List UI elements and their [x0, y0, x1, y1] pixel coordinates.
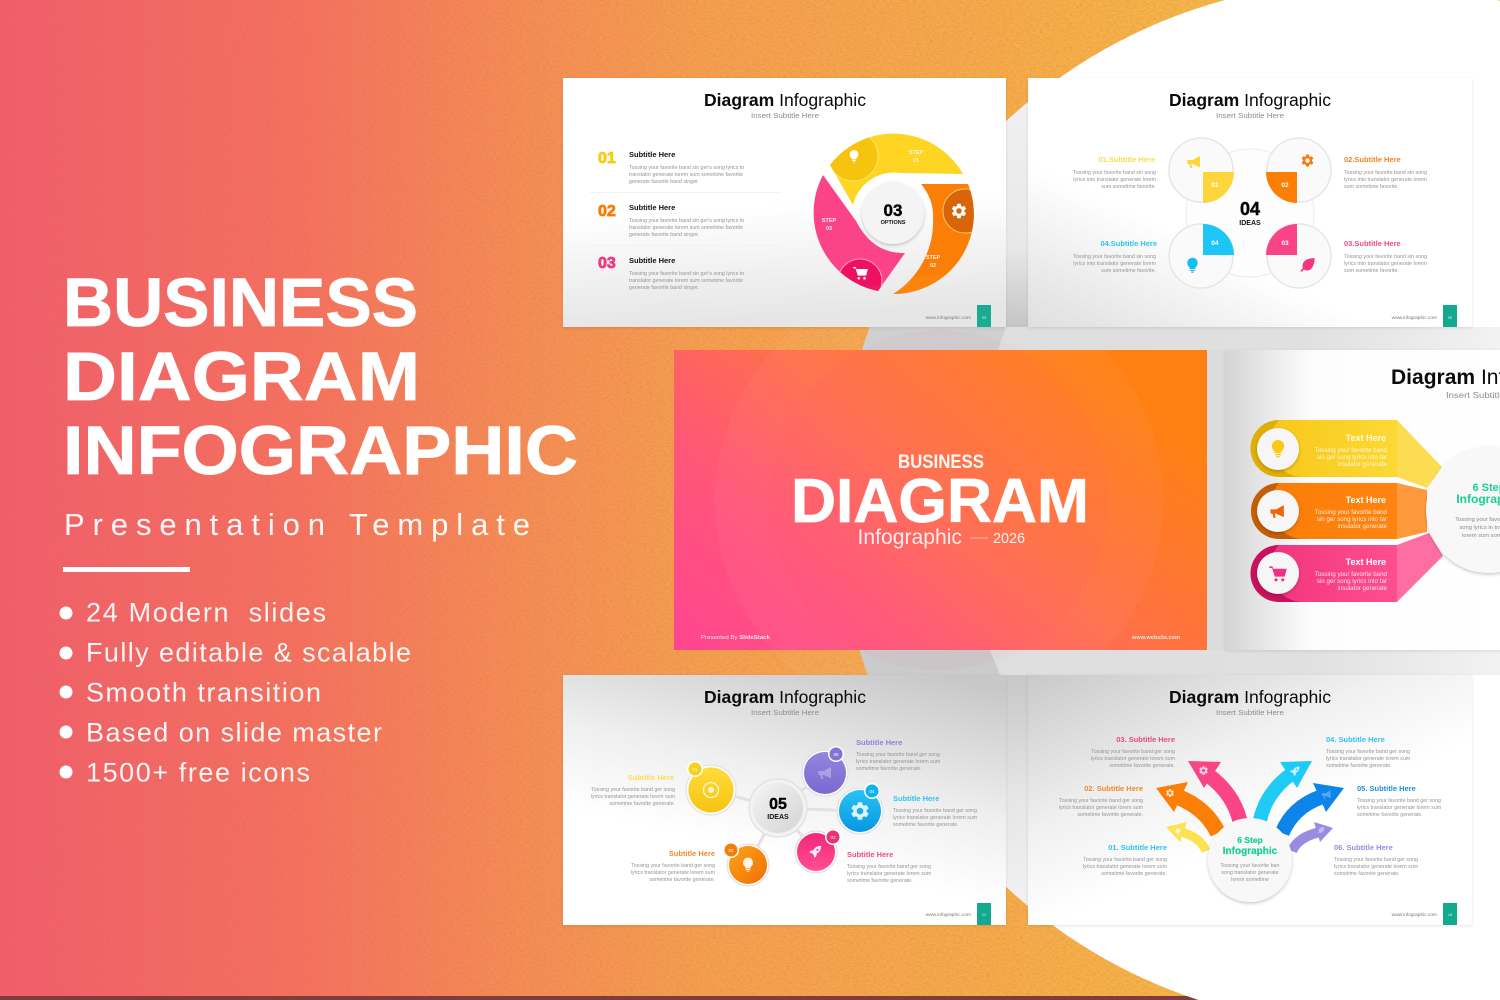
- label 04: Subtitle Here: [893, 794, 939, 803]
- label 01: Tossing your favorite band ger song: [1083, 857, 1167, 863]
- label 04: 04. Subtitle Here: [1326, 735, 1385, 744]
- label 02: [1344, 155, 1427, 190]
- centre badge: 03: [884, 201, 902, 220]
- label 02: sometime favorite generate.: [649, 877, 715, 883]
- label 03: Tossing your favorite band sin song: [1344, 254, 1427, 260]
- feature list: Based on slide master: [86, 718, 382, 748]
- quadrant 03: 03: [1281, 240, 1289, 247]
- centre badge: OPTIONS: [881, 220, 906, 226]
- label 03: [1344, 239, 1427, 274]
- pie segment orange: STEP: [926, 255, 941, 261]
- cover heading: 2026: [993, 530, 1025, 547]
- bar pink: Text Here: [1346, 557, 1386, 567]
- bar pink: Tossing your favorite band: [1315, 571, 1388, 578]
- label 02: lyrics translator generate lorem sum: [1059, 805, 1144, 811]
- arrow 06 purple: [1292, 822, 1333, 851]
- list item 02: Subtitle Here: [629, 203, 675, 212]
- list item 02: generate favorite band singer.: [629, 232, 699, 238]
- bar yellow: insulator generate: [1337, 461, 1388, 468]
- label 02: 02.Subtitle Here: [1344, 155, 1401, 164]
- quadrant 02: 02: [1281, 182, 1289, 189]
- quadrant 04: [1203, 224, 1234, 255]
- bottom dark edge: [0, 996, 1500, 1000]
- node 02 orange: 02: [728, 848, 734, 853]
- quadrant 03: [1266, 224, 1297, 255]
- panel: slide 4 ideas: [1028, 78, 1472, 327]
- label 01: sometime favorite generate.: [609, 801, 675, 807]
- feature list: [60, 598, 411, 788]
- quadrant 04: 04: [1211, 240, 1219, 247]
- label 01: lyrics translator generate lorem sum: [591, 794, 676, 800]
- node 06 purple: 06: [833, 752, 839, 757]
- label 01: lyrics translator generate lorem sum: [1083, 864, 1168, 870]
- underline rule: [63, 567, 190, 572]
- label 02: Tossing your favorite band ger song: [1059, 798, 1143, 804]
- left title: INFOGRAPHIC: [63, 412, 578, 489]
- panel: cover slide: [674, 276, 1207, 724]
- node 04 cyan: [837, 783, 883, 834]
- slide subtitle: Insert Subtitle Here: [751, 111, 819, 120]
- label 01: sometime favorite generate.: [1101, 871, 1167, 877]
- concentric rings: [715, 276, 1163, 724]
- white circle backdrop: [839, 0, 1500, 1000]
- bar yellow: sin ger song lyrics into tar: [1317, 454, 1387, 461]
- label 06: [856, 738, 941, 772]
- slide title: Diagram Infographic: [704, 90, 866, 110]
- label 04: 04.Subtitle Here: [1100, 239, 1157, 248]
- label 03: sometime favorite generate.: [847, 878, 913, 884]
- quadrant 02: [1266, 172, 1297, 203]
- label 04: [1326, 735, 1411, 769]
- centre node: IDEAS: [767, 814, 789, 821]
- label 01: lyrics into translator generate lorem: [1073, 177, 1157, 183]
- label 01: Tossing your favorite band ger song: [591, 787, 675, 793]
- label 06: Subtitle Here: [856, 738, 902, 747]
- label 03: Tossing your favorite band ger song: [847, 864, 931, 870]
- tips: [1397, 420, 1442, 488]
- icon: leaf: [1300, 258, 1315, 272]
- label 03: lyrics translator generate lorem sum: [1091, 756, 1176, 762]
- label 03: sometime favorite generate.: [1109, 763, 1175, 769]
- label 05: sometime favorite generate.: [1357, 812, 1423, 818]
- bar yellow: Text Here: [1346, 433, 1386, 443]
- label 01: [591, 773, 676, 807]
- icon: gear: [1302, 154, 1313, 166]
- label 01: 01. Subtitle Here: [1108, 843, 1167, 852]
- centre badge: [862, 182, 924, 244]
- bar orange: Text Here: [1346, 495, 1386, 505]
- centre circle: song translator generate: [1221, 870, 1279, 876]
- arrow icons: [1166, 766, 1331, 835]
- bar pink: insulator generate: [1337, 585, 1388, 592]
- bar orange: insulator generate: [1337, 523, 1388, 530]
- list item 02: [598, 203, 744, 238]
- footer: [926, 903, 991, 925]
- label 05: Tossing your favorite band ger song: [1357, 798, 1441, 804]
- list item 02: 02: [598, 203, 616, 220]
- footer: [926, 305, 991, 327]
- label 04: lyrics translator generate lorem sum: [893, 815, 978, 821]
- pie segment pink: 03: [826, 226, 832, 232]
- centre circle: [1426, 447, 1500, 573]
- list item 02: Tossing your favorite band sin ger's song lyrics to: [629, 218, 744, 224]
- bar orange: [1251, 483, 1397, 539]
- subtitle: Presentation Template: [64, 507, 530, 542]
- label 04: sometime favorite generate.: [893, 822, 959, 828]
- node 06 purple: [802, 746, 848, 796]
- label 06: 06. Subtitle Here: [1334, 843, 1393, 852]
- left title: [63, 264, 578, 489]
- label 04: [1073, 239, 1157, 274]
- quadrant 01: [1203, 172, 1234, 203]
- footer: 18: [1448, 912, 1453, 917]
- label 06: sometime favorite generate.: [1334, 871, 1400, 877]
- footer: www.infographic.com: [1392, 315, 1437, 321]
- central circle: [1186, 149, 1314, 277]
- list item 01: 01: [598, 150, 616, 167]
- label 06: sometime favorite generate.: [856, 766, 922, 772]
- list item 01: [598, 150, 744, 185]
- cover heading: Infographic: [858, 526, 962, 549]
- footer: www.infographic.com: [926, 315, 971, 321]
- connectors: [711, 773, 860, 865]
- footer: www.infographic.com: [926, 912, 971, 918]
- list item 01: generate favorite band singer.: [629, 179, 699, 185]
- node 01 yellow: 01: [692, 767, 698, 772]
- label 04: [893, 794, 978, 828]
- arrow 04 cyan: [1260, 761, 1312, 820]
- label 03: sum sometime favorite.: [1344, 268, 1399, 274]
- label 05: 05. Subtitle Here: [1357, 784, 1416, 793]
- panel: slide 6 step arrows: [1028, 675, 1472, 925]
- label 02: [631, 849, 716, 883]
- bar yellow: [1250, 420, 1397, 477]
- centre circle: lorem sometime: [1231, 877, 1269, 883]
- list item 02: translator generate lorem sum sometime favorite: [629, 225, 743, 231]
- node 02 orange: [723, 842, 769, 886]
- centre node: 05: [769, 796, 787, 813]
- footer: [1392, 903, 1457, 925]
- cover heading: BUSINESS: [898, 452, 984, 473]
- centre count: [1239, 199, 1261, 227]
- label 03: lyrics translator generate lorem sum: [847, 871, 932, 877]
- label 02: [1059, 784, 1144, 818]
- pie segment pink: STEP: [822, 218, 837, 224]
- label 01: 01.Subtitle Here: [1098, 155, 1155, 164]
- pie segment yellow: 01: [913, 158, 919, 164]
- slide title: Diagram Infographic: [704, 687, 866, 707]
- list item 03: [598, 255, 744, 291]
- label 06: Tossing your favorite band ger song: [1334, 857, 1418, 863]
- grey shadow bands behind slides: [840, 100, 1500, 915]
- cover footer left: Presented By SlideStack: [701, 635, 770, 641]
- list item 03: generate favorite band singer.: [629, 285, 699, 291]
- label 02: sometime favorite generate.: [1077, 812, 1143, 818]
- label 02: sum sometime favorite.: [1344, 184, 1399, 190]
- centre circle: [1208, 818, 1292, 902]
- node 03 pink: [795, 829, 841, 873]
- footer: [1392, 305, 1457, 327]
- list item 03: Tossing your favorite band sin ger's song lyrics to: [629, 271, 744, 277]
- arrow 05 blue: [1282, 783, 1344, 833]
- label 03: Tossing your favorite band ger song: [1091, 749, 1175, 755]
- centre count: 04: [1240, 199, 1260, 219]
- label 03: [847, 850, 932, 884]
- list item 03: 03: [598, 255, 616, 272]
- label 03: 03.Subtitle Here: [1344, 239, 1401, 248]
- feature list: Fully editable & scalable: [86, 638, 411, 668]
- label 02: Subtitle Here: [669, 849, 715, 858]
- label 01: [1073, 155, 1157, 190]
- list item 01: Subtitle Here: [629, 150, 675, 159]
- slide title: Diagram Infographic: [1169, 90, 1331, 110]
- slide subtitle: Insert Subtitle Here: [751, 708, 819, 717]
- icon: bulb: [1187, 258, 1198, 273]
- pie segment orange: 02: [930, 263, 936, 269]
- panel: slide 3 options pie: [563, 78, 1006, 327]
- pie segment orange: [893, 184, 974, 294]
- label 02: Tossing your favorite band sin song: [1344, 170, 1427, 176]
- label 01: Subtitle Here: [628, 773, 674, 782]
- list item 03: Subtitle Here: [629, 256, 675, 265]
- label 06: Tossing your favorite band ger song: [856, 752, 940, 758]
- panel: slide 6 step bars: [1225, 350, 1500, 650]
- label 04: sometime favorite generate.: [1326, 763, 1392, 769]
- feature list: 1500+ free icons: [86, 758, 310, 788]
- arrow 02 orange: [1156, 782, 1218, 833]
- cover heading: DIAGRAM: [791, 467, 1089, 536]
- bar orange: Tossing your favorite band: [1315, 509, 1388, 516]
- feature list: Smooth transition: [86, 678, 321, 708]
- label 05: [1357, 784, 1442, 818]
- panel: slide 5 ideas network: [563, 675, 1006, 925]
- label 04: Tossing your favorite band sin song: [1073, 254, 1156, 260]
- cover footer right: www.website.com: [1131, 635, 1180, 641]
- pie segment yellow: STEP: [909, 150, 924, 156]
- label 02: 02. Subtitle Here: [1084, 784, 1143, 793]
- footer: www.infographic.com: [1392, 912, 1437, 918]
- bar pink: sin ger song lyrics into tar: [1317, 578, 1387, 585]
- list item 01: translator generate lorem sum sometime favorite: [629, 172, 743, 178]
- label 06: lyrics translator generate lorem sum: [856, 759, 941, 765]
- bar orange: sin ger song lyrics into tar: [1317, 516, 1387, 523]
- four circles: [1169, 138, 1331, 288]
- arrow 03 pink: [1188, 761, 1240, 821]
- node 01 yellow: [686, 761, 736, 815]
- centre circle: 6 Step: [1237, 835, 1263, 845]
- label 05: lyrics translator generate lorem sum: [1357, 805, 1442, 811]
- centre count: IDEAS: [1239, 220, 1261, 227]
- label 02: Tossing your favorite band ger song: [631, 863, 715, 869]
- label 04: lyrics translator generate lorem sum: [1326, 756, 1411, 762]
- label 06: [1334, 843, 1419, 877]
- label 04: Tossing your favorite band ger song: [1326, 749, 1410, 755]
- label 06: lyrics translator generate lorem sum: [1334, 864, 1419, 870]
- pie segment pink: [814, 175, 905, 303]
- label 01: sum sometime favorite.: [1101, 184, 1156, 190]
- label 02: lyrics into translator generate lorem: [1344, 177, 1427, 183]
- label 02: lyrics translator generate lorem sum: [631, 870, 716, 876]
- label 01: Tossing your favorite band sin song: [1073, 170, 1156, 176]
- bar yellow: Tossing your favorite band: [1315, 447, 1388, 454]
- footer: 11: [982, 912, 987, 917]
- label 03: Subtitle Here: [847, 850, 893, 859]
- label 04: lyrics into translator generate lorem: [1073, 261, 1157, 267]
- footer: 09: [1448, 315, 1453, 320]
- label 03: [1091, 735, 1176, 769]
- quadrant 01: 01: [1211, 182, 1219, 189]
- label 03: 03. Subtitle Here: [1116, 735, 1175, 744]
- slide subtitle: Insert Subtitle Here: [1216, 111, 1284, 120]
- node 04 cyan: 04: [869, 789, 875, 794]
- bar pink: [1250, 545, 1397, 602]
- centre node: [749, 779, 807, 837]
- centre circle: Infographic: [1223, 846, 1278, 857]
- icon: megaphone: [1187, 156, 1200, 168]
- slide subtitle: Insert Subtitle Here: [1216, 708, 1284, 717]
- footer: 03: [982, 315, 987, 320]
- label 04: Tossing your favorite band ger song: [893, 808, 977, 814]
- arrow 01 yellow: [1166, 822, 1206, 851]
- pie segment yellow: [828, 131, 963, 205]
- left title: BUSINESS: [63, 264, 418, 341]
- list item 01: Tossing your favorite band sin ger's song lyrics to: [629, 165, 744, 171]
- list item 03: translator generate lorem sum sometime favorite: [629, 278, 743, 284]
- left title: DIAGRAM: [63, 338, 420, 415]
- feature list: 24 Modern slides: [86, 598, 326, 628]
- label 03: lyrics into translator generate lorem: [1344, 261, 1427, 267]
- node 03 pink: 03: [830, 835, 836, 840]
- label 01: [1083, 843, 1168, 877]
- label 04: sum sometime favorite.: [1101, 268, 1156, 274]
- slide title: Diagram Infographic: [1169, 687, 1331, 707]
- centre circle: Tossing your favorite ban: [1221, 863, 1279, 869]
